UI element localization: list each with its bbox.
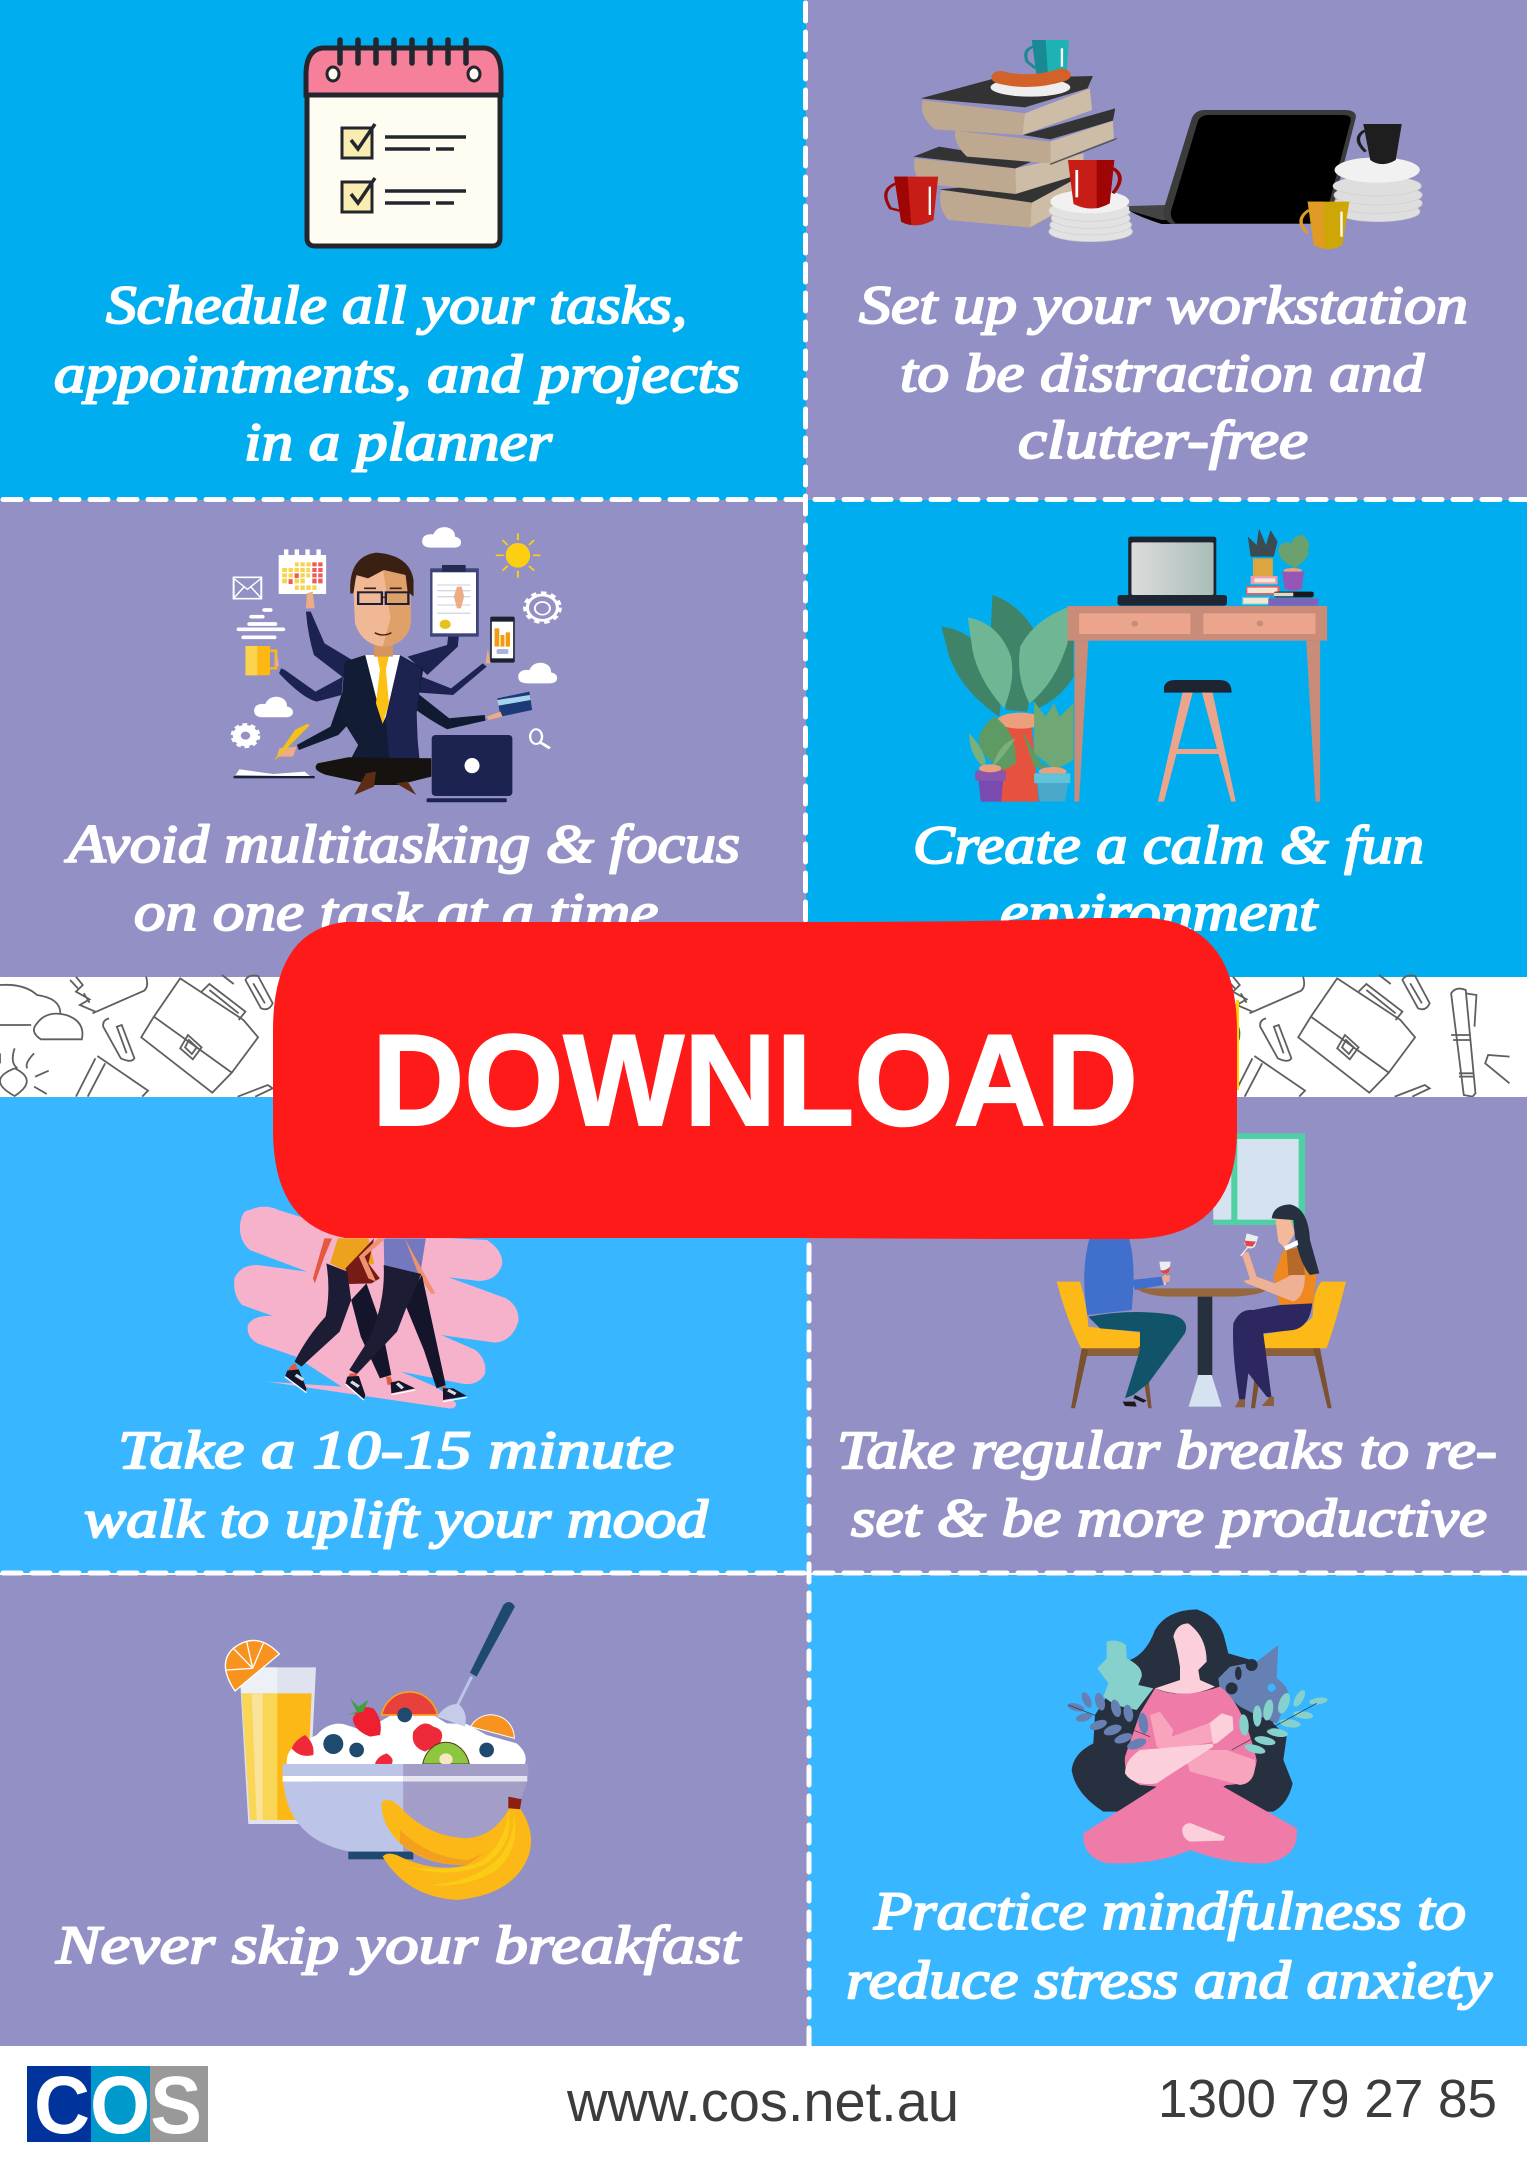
panel: mindfulness [808,1575,1527,2046]
icon: desk with plants and stool [941,528,1327,802]
heading: breakfast tip: Never skip your breakfast [55,1915,742,1975]
heading: workstation tip: to be distraction and [900,343,1425,403]
heading: multitasking tip: on one task at a time. [134,882,674,942]
panel: workstation [806,0,1527,500]
icon: planner notepad [306,40,501,246]
heading: breaks tip: set & be more productive [851,1488,1487,1548]
panel: walking [0,1097,808,1573]
panel: patterned strip [0,975,1527,1097]
button: download [273,918,1237,1239]
heading: breaks tip [837,1420,1497,1548]
heading: workstation tip: Set up your workstation [859,275,1468,335]
panel: calm environment [806,500,1527,977]
heading: mindfulness tip: reduce stress and anxiety [846,1950,1492,2010]
heading: breaks tip: Take regular breaks to re- [837,1420,1497,1480]
button: download: DOWNLOAD [372,1007,1138,1153]
footer [0,2046,1527,2160]
icon: couple at café table [1057,1133,1346,1408]
website address: www.cos.net.au [566,2070,959,2134]
icon: multitasking businessman [232,527,560,802]
icon: breakfast bowl, juice and bananas [225,1602,531,1900]
heading: mindfulness tip: Practice mindfulness to [873,1881,1466,1941]
heading: schedule tip: in a planner [244,412,553,472]
heading: walk tip: walk to uplift your mood [84,1489,709,1549]
heading: workstation tip [859,275,1468,470]
heading: walk tip: Take a 10-15 minute [118,1420,674,1480]
phone number: 1300 79 27 85 [1158,2069,1497,2129]
heading: multitasking tip: Avoid multitasking & focus [65,814,740,874]
heading: environment tip: Create a calm & fun [913,815,1424,875]
heading: walk tip [84,1420,709,1549]
icon: couple walking [234,1207,518,1408]
panel: multitasking [0,500,806,977]
heading: environment tip: environment [1000,882,1319,942]
heading: schedule tip: Schedule all your tasks, [106,275,687,335]
heading: schedule tip: appointments, and projects [54,344,740,404]
heading: multitasking tip [65,814,740,942]
heading: workstation tip: clutter-free [1018,410,1308,470]
logo: COS: COS [34,2060,202,2151]
heading: mindfulness tip [846,1881,1492,2010]
icon: cluttered desk with books, mugs and laptop [886,40,1422,249]
icon: meditating woman with leaves [1067,1609,1328,1863]
panel: schedule [0,0,806,500]
panel: breaks [808,1097,1527,1573]
panel: breakfast [0,1575,808,2046]
heading: schedule tip [54,275,740,472]
heading: environment tip [913,815,1424,942]
